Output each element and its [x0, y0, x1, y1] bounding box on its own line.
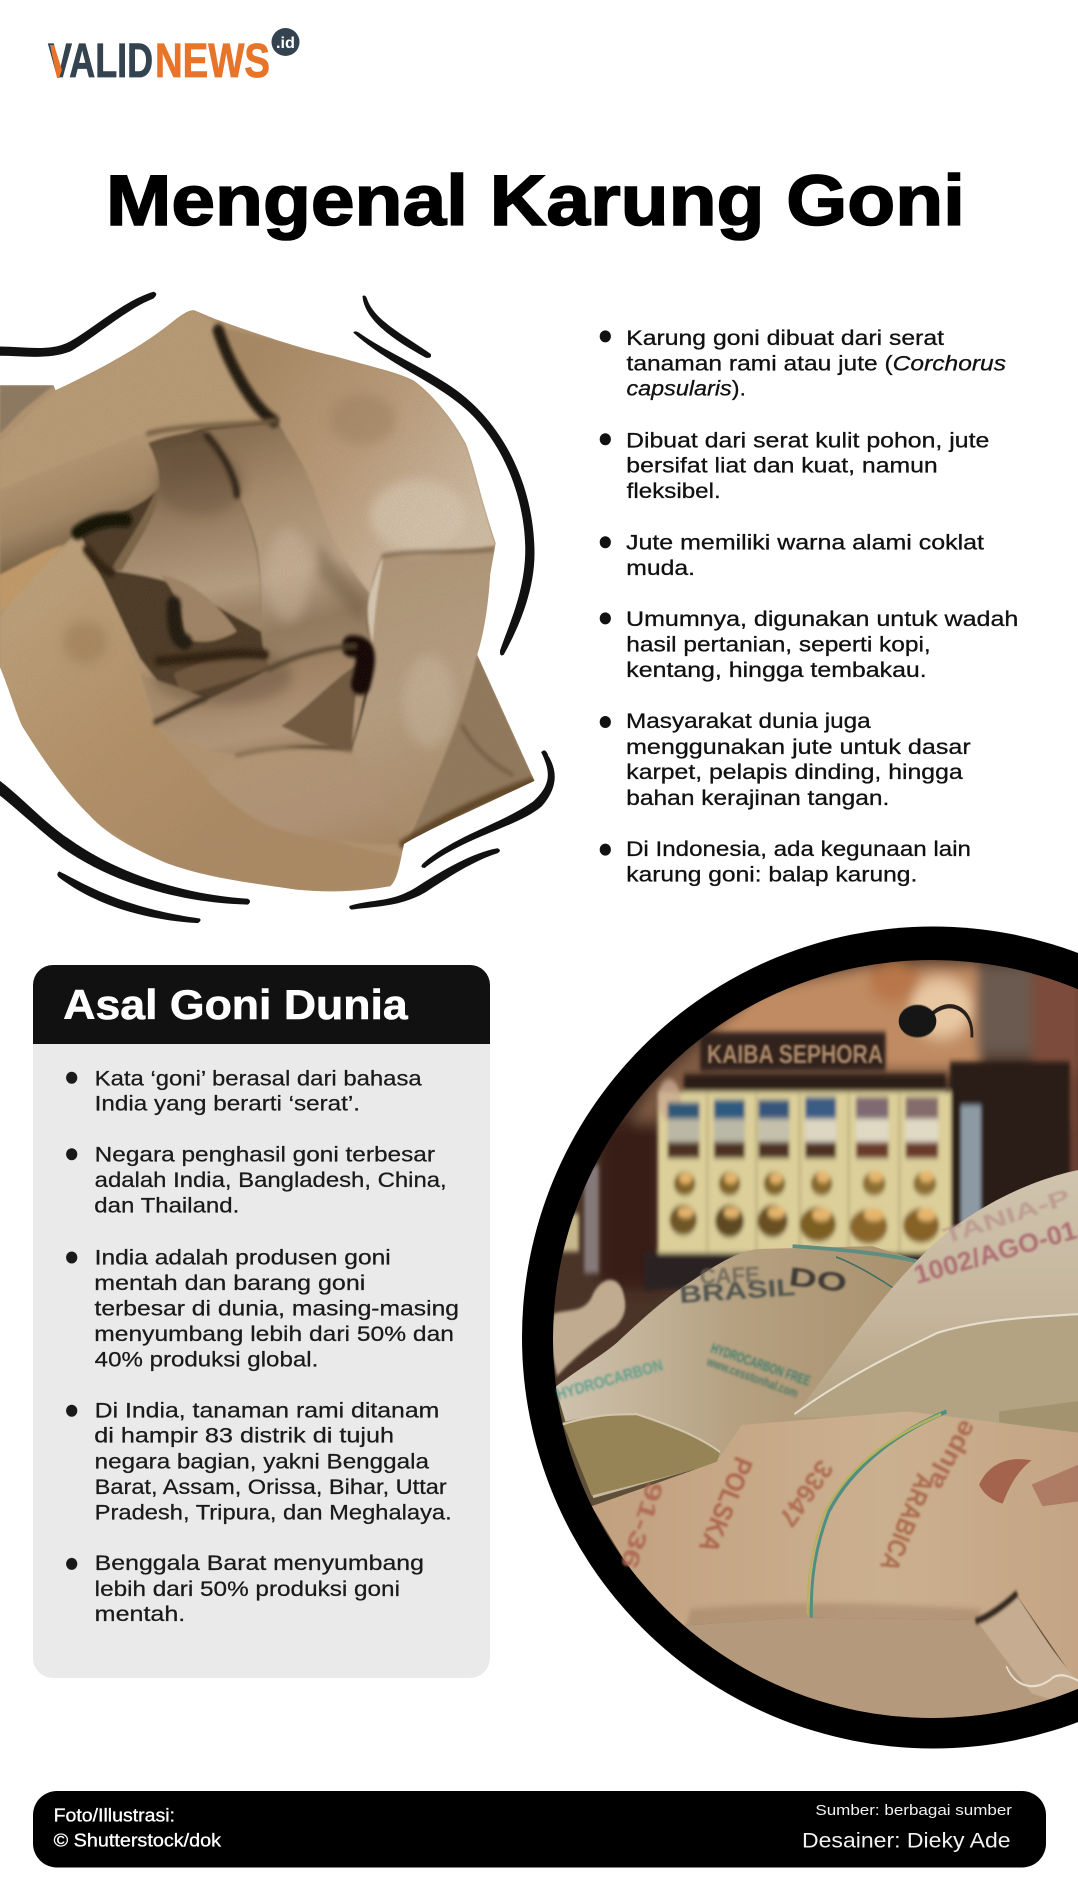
centre mid band	[180, 648, 366, 754]
item: bahan serat rami: capsularis ).	[626, 377, 746, 401]
photo lettering: TANIA-P	[940, 1184, 1073, 1249]
source and designer credit	[802, 1802, 1012, 1853]
footer bar	[33, 1791, 1046, 1868]
item: kegunaan dunia: menggunakan jute untuk dasar	[626, 735, 971, 759]
right front panel	[351, 547, 496, 844]
sack body	[0, 310, 534, 892]
photo lettering: KAIBA SEPHORA	[707, 1039, 883, 1069]
item: balap karung: Di Indonesia, ada kegunaan lain	[626, 837, 971, 861]
lower left mass	[0, 537, 401, 892]
item: produsen india: India adalah produsen goni	[95, 1246, 391, 1269]
panel: asal goni dunia	[33, 965, 490, 1678]
item: produsen india: 40% produksi global.	[95, 1349, 318, 1372]
shelf labels	[668, 1097, 938, 1158]
photo lettering: www.cesstonhal.com	[704, 1353, 800, 1401]
right hanging tail	[407, 655, 535, 844]
photo: coffee sacks in circular black frame	[522, 926, 1078, 1756]
item: penanaman di india: negara bagian, yakni Benggala	[95, 1450, 429, 1473]
item: produsen india: menyumbang lebih dari 50% dan	[94, 1323, 454, 1346]
item: arti kata goni: Kata ‘goni’ berasal dari bahasa	[95, 1067, 422, 1090]
item: arti kata goni: India yang berarti ‘serat’.	[95, 1093, 360, 1116]
photo lettering: BRASIL	[679, 1274, 796, 1309]
low centre folds	[159, 575, 237, 642]
photo lettering	[554, 1039, 1078, 1576]
item: warna jute	[600, 530, 984, 580]
illustration: burlap sack photo with brush strokes	[0, 280, 580, 940]
left band	[0, 450, 160, 575]
item: penanaman di india	[66, 1400, 452, 1524]
item: kegunaan dunia: karpet, pelapis dinding, hingga	[626, 760, 963, 784]
item: sifat jute: Dibuat dari serat kulit pohon, jute	[626, 428, 989, 452]
lower wide band	[207, 749, 403, 844]
source and designer credit: Desainer: Dieky Ade	[802, 1830, 1011, 1853]
item: kegunaan umum: Umumnya, digunakan untuk wadah	[626, 607, 1018, 631]
small sacks left	[550, 1280, 625, 1376]
photo lettering: ARABICA	[874, 1470, 940, 1576]
cavity	[78, 421, 374, 751]
photo lettering: 91-36	[614, 1478, 668, 1572]
photo lettering: POLSKA	[693, 1453, 758, 1557]
item: produsen india	[66, 1246, 459, 1372]
heading: asal goni dunia: Asal Goni Dunia	[63, 981, 408, 1028]
photo credit: © Shutterstock/dok	[54, 1831, 222, 1851]
item: sifat jute: fleksibel.	[627, 479, 721, 503]
item: bahan serat rami: tanaman rami atau jute ( Corchorus	[626, 351, 1006, 375]
photo lettering: HYDROCARBON FREE	[709, 1340, 813, 1389]
photo lettering: DO	[787, 1261, 848, 1298]
brush strokes	[0, 292, 555, 923]
photo lettering: alupe	[919, 1413, 980, 1493]
item: kegunaan dunia	[600, 709, 971, 810]
panel header	[33, 965, 490, 1044]
item: kegunaan dunia: bahan kerajinan tangan.	[626, 786, 889, 810]
item: balap karung	[600, 837, 971, 886]
title: Mengenal Karung Goni	[106, 162, 965, 241]
brass knobs	[669, 1172, 939, 1244]
sack center left	[556, 1244, 918, 1498]
item: kegunaan dunia: Masyarakat dunia juga	[626, 709, 871, 733]
item: sifat jute	[600, 428, 989, 503]
top-left rim	[55, 310, 198, 390]
top-right panel	[216, 326, 496, 596]
item: penanaman di india: di hampir 83 distrik di tujuh	[94, 1425, 394, 1448]
item: negara penghasil: dan Thailand.	[94, 1194, 239, 1217]
text block: karung goni facts	[600, 326, 1018, 886]
logo: Validnews.id	[48, 28, 300, 88]
photo lettering: 33647	[773, 1455, 840, 1532]
lamp	[899, 1005, 972, 1037]
item: negara penghasil: adalah India, Bangladesh, China,	[95, 1169, 447, 1192]
item: kegunaan umum: kentang, hingga tembakau.	[626, 658, 927, 682]
item: balap karung: karung goni: balap karung.	[626, 862, 917, 886]
logo: Validnews.id: .id	[276, 35, 295, 52]
photo lettering: HYDROCARBON	[554, 1357, 665, 1404]
item: benggala barat: Benggala Barat menyumbang	[95, 1552, 424, 1575]
item: benggala barat: lebih dari 50% produksi goni	[95, 1578, 400, 1601]
item: warna jute: muda.	[626, 556, 695, 580]
item: sifat jute: bersifat liat dan kuat, namun	[626, 454, 938, 478]
sack right top	[793, 1169, 1078, 1436]
item: negara penghasil	[66, 1144, 447, 1217]
source and designer credit: Sumber: berbagai sumber	[815, 1802, 1012, 1819]
item: produsen india: mentah dan barang goni	[94, 1272, 365, 1295]
photo lettering: 1002/AGO-01	[910, 1215, 1078, 1290]
item: kegunaan umum: hasil pertanian, seperti kopi,	[626, 632, 931, 656]
item: arti kata goni	[66, 1067, 422, 1116]
inner fold centre	[204, 422, 371, 669]
logo: Validnews.id: VALID	[48, 35, 153, 88]
item: penanaman di india: Barat, Assam, Orissa, Bihar, Uttar	[95, 1476, 447, 1499]
photo lettering: CAFE	[699, 1262, 760, 1289]
item: penanaman di india: Di India, tanaman rami ditanam	[95, 1400, 439, 1422]
item: benggala barat: mentah.	[95, 1603, 185, 1626]
sack bottom	[592, 1410, 1078, 1718]
item: warna jute: Jute memiliki warna alami coklat	[626, 530, 984, 554]
frayed seam	[0, 545, 63, 613]
item: negara penghasil: Negara penghasil goni terbesar	[95, 1144, 435, 1166]
cavity left fold	[111, 490, 158, 570]
sack underlayer	[556, 1388, 1076, 1718]
item: bahan serat rami: Karung goni dibuat dari serat	[626, 326, 944, 350]
shaded back wedge	[281, 666, 357, 747]
highlights and crease shadows	[63, 394, 466, 747]
item: bahan serat rami	[600, 326, 1006, 401]
photo credit: Foto/Illustrasi:	[54, 1806, 175, 1826]
logo: Validnews.id: NEWS	[155, 35, 270, 88]
inner fold left	[111, 431, 261, 631]
item: benggala barat	[66, 1552, 424, 1626]
photo credit	[54, 1806, 222, 1851]
item: kegunaan umum	[600, 607, 1018, 682]
item: produsen india: terbesar di dunia, masing-masing	[94, 1298, 459, 1321]
item: penanaman di india: Pradesh, Tripura, dan Meghalaya.	[95, 1501, 452, 1524]
